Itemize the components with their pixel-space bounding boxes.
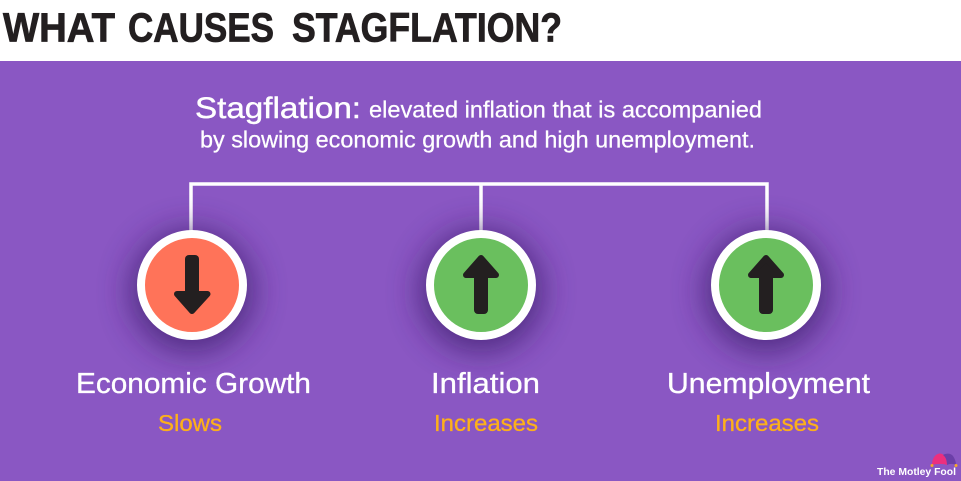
title: CAUSES <box>128 4 274 50</box>
label: economic growth: Economic Growth <box>76 368 311 400</box>
label: inflation: Increases <box>434 410 538 436</box>
icon: inflation up arrow <box>419 229 543 353</box>
icon: economic growth down arrow <box>130 229 254 353</box>
logo: The Motley Fool <box>877 454 958 478</box>
label: unemployment: Unemployment <box>667 368 870 400</box>
label: unemployment <box>667 368 870 436</box>
definition text: Stagflation: <box>195 92 361 125</box>
definition text <box>195 92 762 152</box>
icon: unemployment up arrow <box>704 229 828 353</box>
title <box>3 4 562 50</box>
label: inflation <box>431 368 540 436</box>
label: economic growth: Slows <box>158 410 222 436</box>
label: inflation: Inflation <box>431 368 540 400</box>
connector lines <box>191 184 767 232</box>
label: unemployment: Increases <box>715 410 819 436</box>
definition text: elevated inflation that is accompanied <box>369 96 762 122</box>
definition text: by slowing economic growth and high unemployment. <box>200 126 755 152</box>
logo: The Motley Fool: The Motley Fool <box>877 466 956 478</box>
title: WHAT <box>3 4 115 50</box>
title: STAGFLATION? <box>292 4 562 50</box>
label: economic growth <box>76 368 311 436</box>
